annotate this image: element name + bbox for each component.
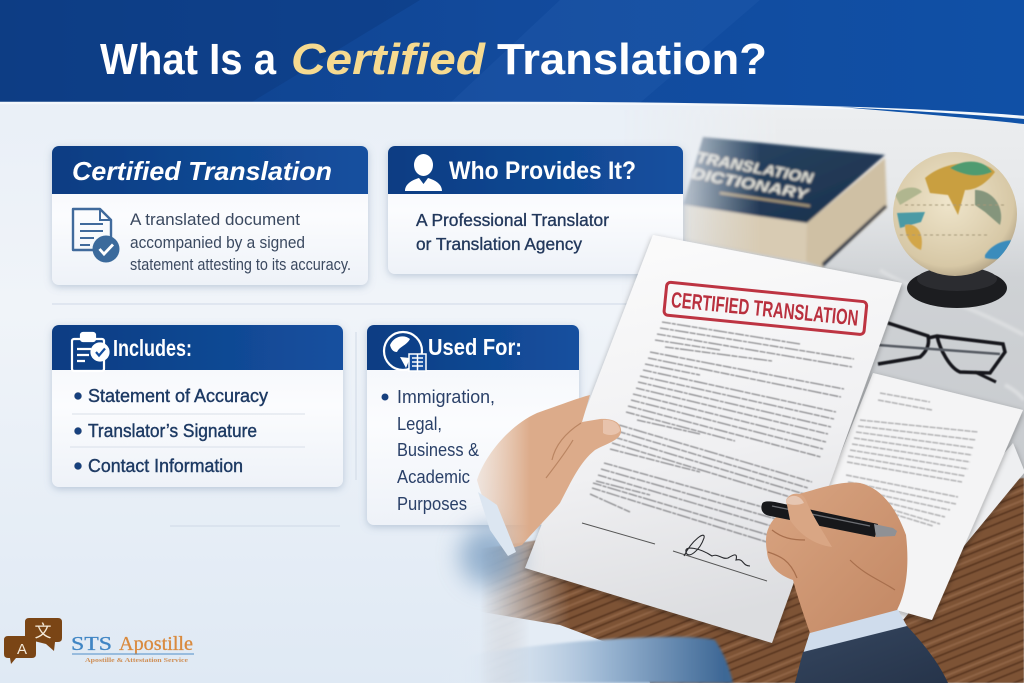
thumb bbox=[786, 494, 832, 547]
background paper sheets bbox=[790, 373, 1024, 620]
reading glasses bbox=[878, 323, 1005, 382]
card: certified translation bbox=[52, 146, 368, 285]
fade overlay over table edge bbox=[440, 605, 650, 683]
card description: accompanied by a signed bbox=[130, 233, 305, 252]
icon: professional person bbox=[405, 154, 442, 191]
title end: Translation?: Translation? bbox=[497, 35, 767, 84]
list of included items bbox=[70, 386, 305, 476]
left sleeve blur bbox=[460, 526, 520, 586]
divider lines bbox=[52, 304, 640, 526]
card heading: Certified Translation bbox=[72, 156, 332, 186]
right shirt cuff and suit sleeve bbox=[795, 608, 948, 683]
pen bbox=[761, 501, 897, 537]
signature lines bbox=[582, 523, 767, 581]
icon: translation speech bubbles: 文 bbox=[34, 617, 52, 642]
book cover text: DICTIONARY bbox=[690, 165, 812, 204]
list of included items: Statement of Accuracy bbox=[88, 386, 268, 406]
logo: STS Apostille: Apostille bbox=[119, 633, 193, 655]
book cover text bbox=[690, 149, 816, 204]
icon: translation speech bubbles: A bbox=[17, 641, 27, 658]
left shirt cuff bbox=[478, 492, 516, 556]
list of uses: Legal, bbox=[397, 414, 442, 434]
logo: STS Apostille bbox=[4, 617, 194, 664]
logo: STS Apostille: Apostille & Attestation Service bbox=[85, 657, 188, 664]
list of included items: Translator’s Signature bbox=[88, 421, 257, 441]
stamp: certified translation bbox=[664, 282, 867, 335]
card: used for bbox=[367, 325, 579, 525]
list of uses: Business & bbox=[397, 440, 479, 460]
card heading: Includes: bbox=[113, 335, 192, 361]
card description: A Professional Translator bbox=[416, 210, 609, 230]
card description: A translated document bbox=[130, 210, 300, 229]
card description: or Translation Agency bbox=[416, 234, 582, 254]
title highlight: Certified: Certified bbox=[291, 35, 486, 84]
icon: globe and building bbox=[384, 332, 426, 371]
card description bbox=[130, 210, 351, 274]
document body lines bbox=[590, 322, 854, 543]
stamp: certified translation: CERTIFIED TRANSLATION bbox=[670, 287, 860, 331]
signature bbox=[684, 535, 750, 566]
list of uses: Immigration, bbox=[397, 387, 495, 407]
list of uses: Academic bbox=[397, 467, 470, 487]
card heading: Who Provides It? bbox=[449, 157, 636, 185]
book: translation dictionary bbox=[683, 137, 887, 267]
photo: marble desk backdrop bbox=[684, 123, 1024, 510]
header banner bbox=[0, 0, 1024, 124]
left hand holding document bbox=[477, 395, 621, 556]
book cover text: TRANSLATION bbox=[695, 149, 816, 188]
right hand signing bbox=[761, 482, 907, 633]
list of included items: Contact Information bbox=[88, 456, 243, 476]
left sleeve bbox=[440, 637, 733, 683]
card: includes bbox=[52, 325, 343, 487]
card heading: Used For: bbox=[428, 334, 522, 360]
logo: STS Apostille: STS bbox=[71, 633, 112, 655]
globe on stand bbox=[893, 152, 1018, 308]
card description: statement attesting to its accuracy. bbox=[130, 255, 351, 274]
title: What Is a bbox=[100, 35, 276, 84]
card: who provides it bbox=[388, 146, 683, 274]
icon: document with check bbox=[73, 209, 120, 262]
list of uses bbox=[382, 387, 495, 514]
icon: translation speech bubbles bbox=[4, 617, 62, 664]
list of uses: Purposes bbox=[397, 494, 467, 514]
main certified document bbox=[525, 235, 902, 643]
card description bbox=[416, 210, 609, 254]
photo: wooden table bbox=[440, 478, 1024, 683]
icon: clipboard with check bbox=[72, 333, 108, 371]
